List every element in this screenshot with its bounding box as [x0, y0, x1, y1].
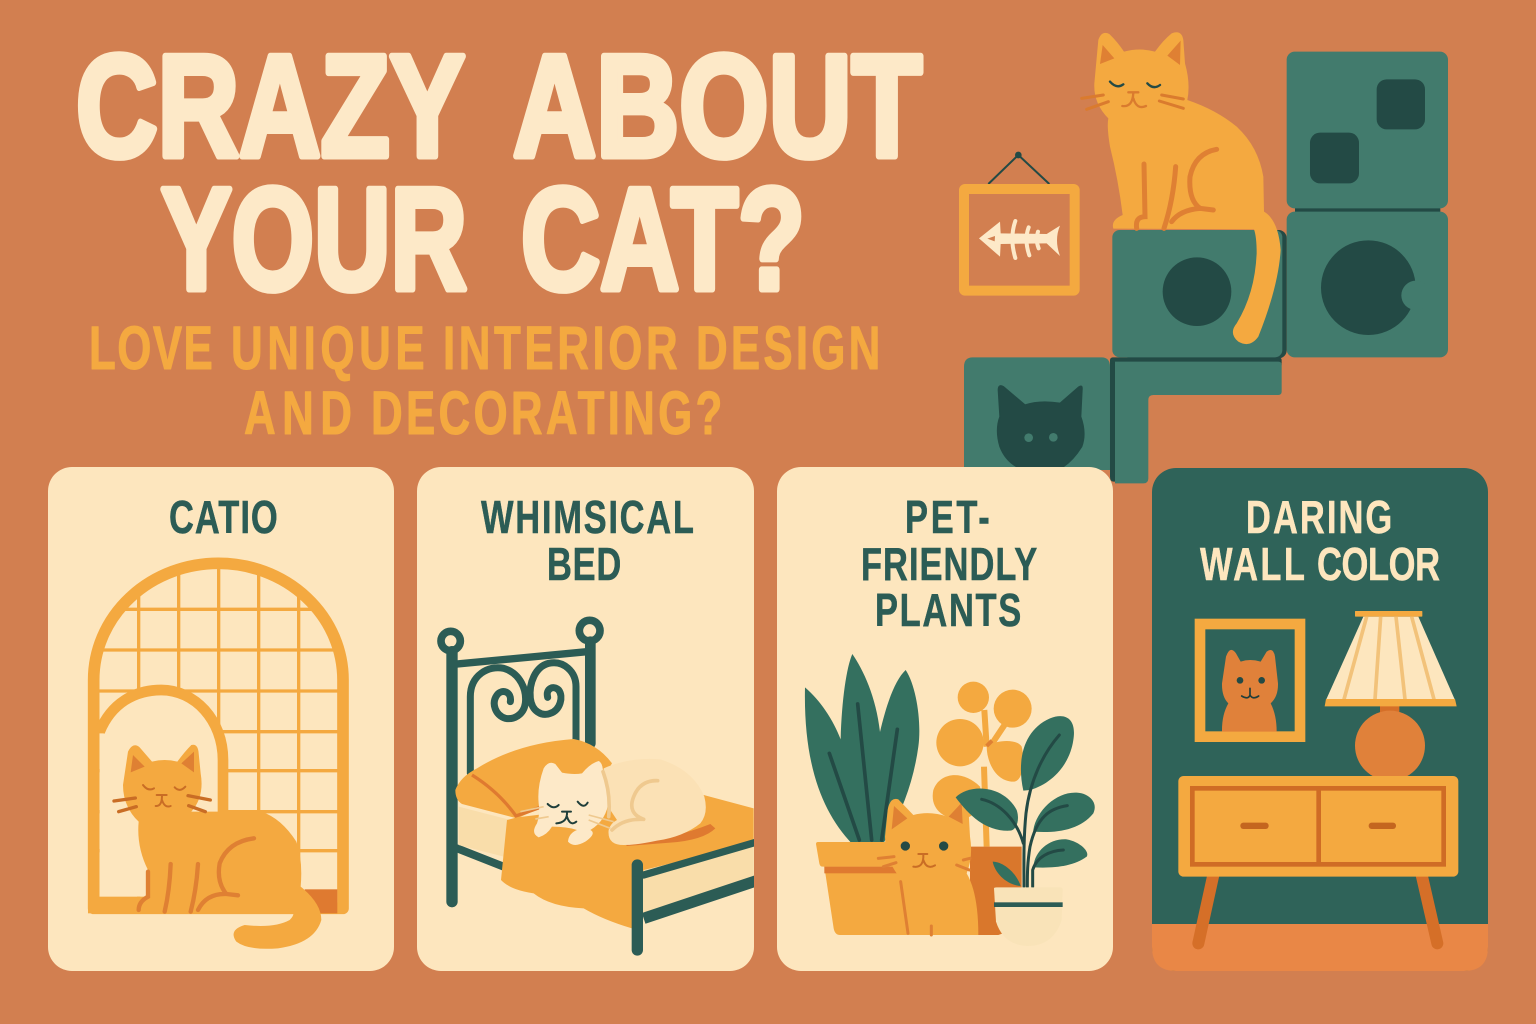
title: CRAZY [76, 25, 465, 187]
heading: whimsical bed: BED [547, 538, 621, 590]
heading: whimsical bed [481, 491, 694, 590]
terracotta pot back [970, 847, 1022, 935]
bed illustration [441, 620, 764, 950]
subtitle: DESIGN [696, 315, 880, 383]
heading: pet-friendly plants [861, 491, 1037, 636]
heading: daring wall color [1200, 491, 1440, 590]
plants illustration [805, 654, 1095, 946]
cat tree illustration [964, 32, 1448, 483]
room illustration [1178, 611, 1458, 943]
blanket [501, 795, 754, 928]
subtitle [89, 315, 880, 448]
table lamp [1325, 611, 1457, 781]
subtitle: LOVE [89, 315, 213, 383]
framed cat portrait [1200, 624, 1300, 737]
cat in catio [114, 745, 321, 949]
mattress [459, 807, 754, 913]
subtitle: DECORATING? [371, 380, 722, 448]
cube lower right [1287, 212, 1448, 357]
white cat sleeping [520, 759, 706, 845]
bed footboard and rails [637, 840, 764, 950]
L shaped shelf [1110, 357, 1282, 483]
title [76, 25, 922, 320]
console table legs [1198, 875, 1437, 943]
subtitle: UNIQUE [231, 315, 425, 383]
heading: pet-friendly plants: PLANTS [875, 584, 1021, 636]
panel: daring wall color [1152, 468, 1488, 971]
yellow plant [933, 682, 1032, 847]
title: CAT? [521, 158, 805, 320]
small cream pot [994, 887, 1063, 946]
iron headboard [441, 620, 600, 902]
heading: pet-friendly plants: PET- [905, 491, 990, 543]
heading: pet-friendly plants: FRIENDLY [861, 538, 1037, 590]
heading: daring wall color: COLOR [1317, 538, 1440, 590]
orange cat sitting on tree [1082, 32, 1281, 344]
pillow [455, 739, 612, 818]
title: YOUR [161, 158, 467, 320]
cube lower left with peeking cat [964, 357, 1110, 470]
panel: catio [48, 467, 394, 971]
orange cat [878, 799, 978, 935]
wall frame with fish skeleton [964, 152, 1075, 291]
subtitle: AND [244, 380, 352, 448]
heading: catio: CATIO [169, 491, 278, 543]
cube upper right [1287, 52, 1448, 215]
leafy plant [956, 716, 1095, 887]
heading: whimsical bed: WHIMSICAL [481, 491, 694, 543]
panel: pet-friendly plants [777, 467, 1113, 971]
yellow pot [816, 842, 907, 935]
cube middle [1112, 230, 1287, 358]
subtitle: INTERIOR [443, 315, 678, 383]
catio illustration [88, 558, 349, 949]
panel: whimsical bed [417, 467, 764, 971]
heading: daring wall color: DARING [1246, 491, 1392, 543]
heading: daring wall color: WALL [1200, 538, 1305, 590]
snake plant leaves [805, 654, 919, 843]
console table [1178, 776, 1458, 877]
title: ABOUT [513, 25, 922, 187]
